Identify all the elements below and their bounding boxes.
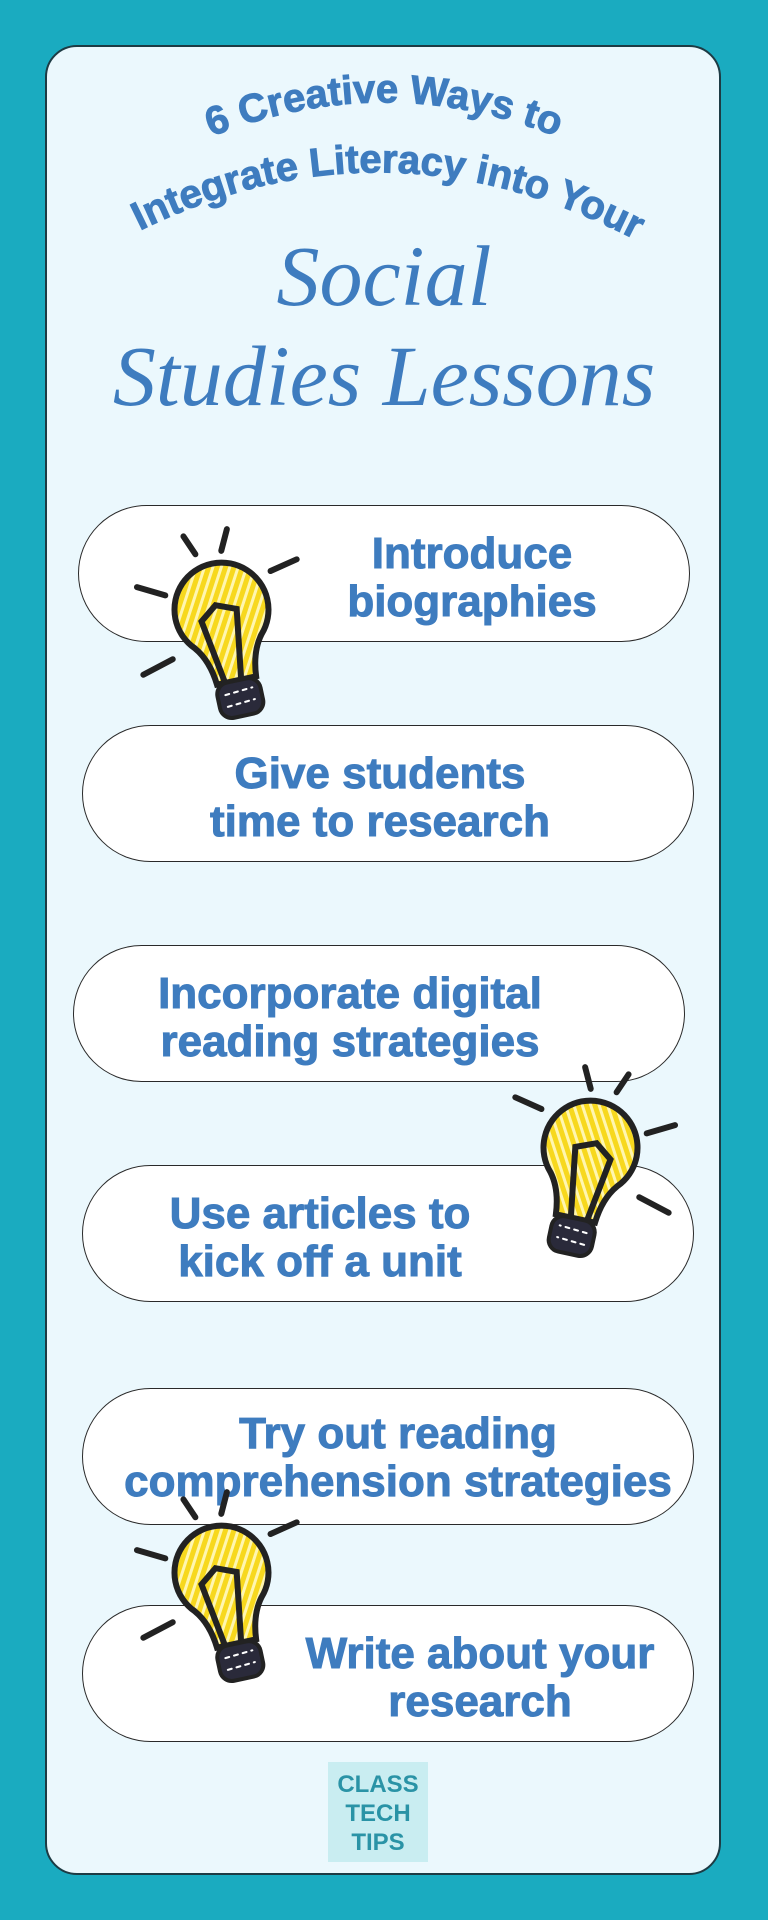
text 1: biographies bbox=[347, 577, 597, 626]
title: 6 Creative Ways to bbox=[206, 74, 560, 134]
text 2: Give students bbox=[235, 749, 525, 798]
icon: bulb 3 bbox=[117, 1477, 326, 1697]
text 6: research bbox=[388, 1677, 572, 1726]
text 6 bbox=[305, 1629, 654, 1726]
logo: CLASS bbox=[337, 1771, 419, 1798]
icon: bulb 1 bbox=[117, 514, 326, 734]
text 2 bbox=[210, 749, 550, 846]
title bbox=[113, 74, 655, 424]
title: Social bbox=[277, 228, 491, 324]
text 4 bbox=[170, 1189, 470, 1286]
pill 6 bbox=[82, 1605, 694, 1742]
logo: TIPS bbox=[351, 1829, 405, 1856]
text 5: Try out reading bbox=[239, 1409, 557, 1458]
pill 3 bbox=[73, 945, 685, 1082]
logo bbox=[328, 1762, 428, 1862]
pill 4 bbox=[82, 1165, 694, 1302]
text 5 bbox=[124, 1409, 672, 1506]
text 3 bbox=[158, 969, 542, 1066]
text 1: Introduce bbox=[372, 529, 572, 578]
text 4: kick off a unit bbox=[178, 1237, 462, 1286]
text 1 bbox=[347, 529, 597, 626]
icon: bulb 2 bbox=[486, 1052, 695, 1272]
title: Studies Lessons bbox=[113, 328, 655, 424]
pill 5 bbox=[82, 1388, 694, 1525]
text 6: Write about your bbox=[306, 1629, 654, 1678]
text 4: Use articles to bbox=[170, 1189, 470, 1238]
title: Integrate Literacy into Your bbox=[130, 144, 646, 238]
logo: TECH bbox=[345, 1800, 411, 1827]
text 2: time to research bbox=[210, 797, 550, 846]
pill 1 bbox=[78, 505, 690, 642]
text 3: Incorporate digital bbox=[158, 969, 542, 1018]
text 3: reading strategies bbox=[160, 1017, 540, 1066]
pill 2 bbox=[82, 725, 694, 862]
text 5: comprehension strategies bbox=[124, 1457, 672, 1506]
